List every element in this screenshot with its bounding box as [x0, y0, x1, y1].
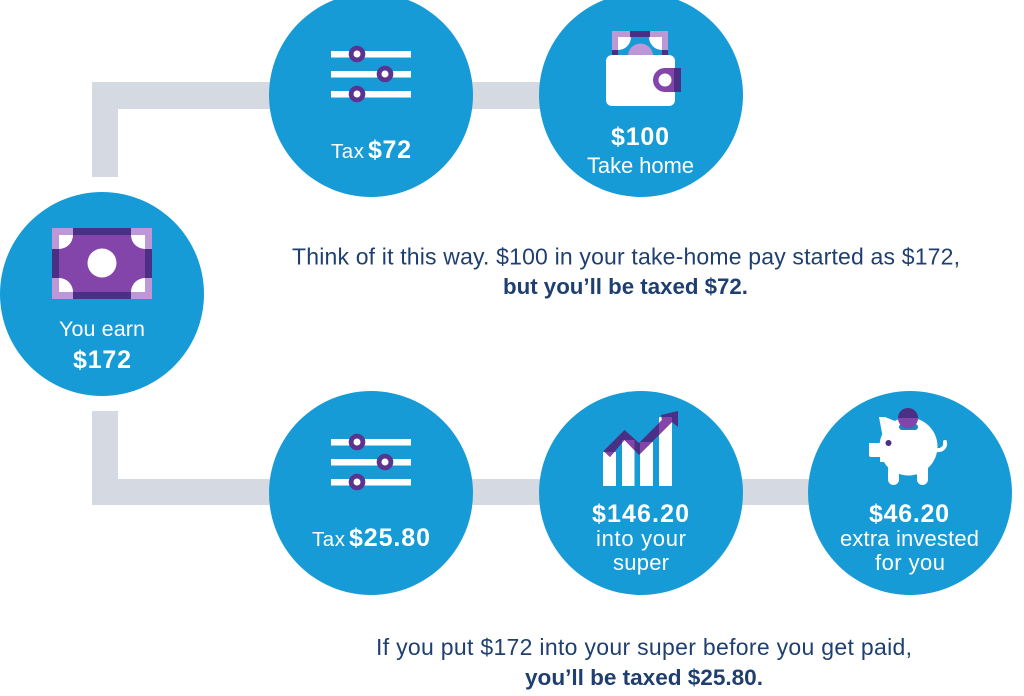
icon: sliders [331, 48, 411, 100]
label: extra invested for you [840, 526, 979, 575]
text: super explanation: If you put $172 into your super before you get paid, [376, 634, 912, 660]
label: tax $72 [331, 136, 411, 164]
label: into your super: into your [596, 526, 686, 551]
label: tax $25.80: Tax [312, 528, 346, 551]
icon: sliders [331, 436, 411, 488]
node: you earn [0, 192, 204, 396]
label: into your super [596, 526, 686, 575]
node: take home [539, 0, 743, 197]
connector: bottom path [92, 411, 910, 505]
label: take home: Take home [587, 153, 694, 178]
node: tax $25.80 [269, 391, 473, 595]
value: $172: $172 [73, 346, 131, 374]
node: extra invested [808, 391, 1012, 595]
text: super explanation [376, 634, 912, 690]
label: tax $72: Tax [331, 140, 365, 163]
icon: piggy bank [869, 408, 945, 485]
value: $100: $100 [611, 123, 669, 151]
label: into your super: super [613, 550, 669, 575]
value: $146.20: $146.20 [592, 500, 689, 528]
label: extra invested for you: for you [875, 550, 945, 575]
icon: banknote [52, 228, 152, 299]
icon: wallet [606, 31, 681, 106]
icon: rising chart [603, 411, 678, 486]
text: super explanation: you’ll be taxed $25.80. [525, 665, 763, 690]
label: extra invested for you: extra invested [840, 526, 979, 551]
label: tax $72: $72 [368, 136, 411, 164]
text: take-home explanation: Think of it this way. $100 in your take-home pay started as $172, [292, 244, 960, 270]
label: tax $25.80 [312, 524, 430, 552]
label: tax $25.80: $25.80 [349, 524, 430, 552]
label: you earn: You earn [59, 317, 145, 341]
connector: top path [92, 82, 640, 177]
text: take-home explanation [292, 244, 960, 299]
node: into super [539, 391, 743, 595]
node: tax $72 [269, 0, 473, 197]
text: take-home explanation: but you’ll be taxed $72. [503, 274, 748, 299]
value: $46.20: $46.20 [869, 500, 949, 528]
